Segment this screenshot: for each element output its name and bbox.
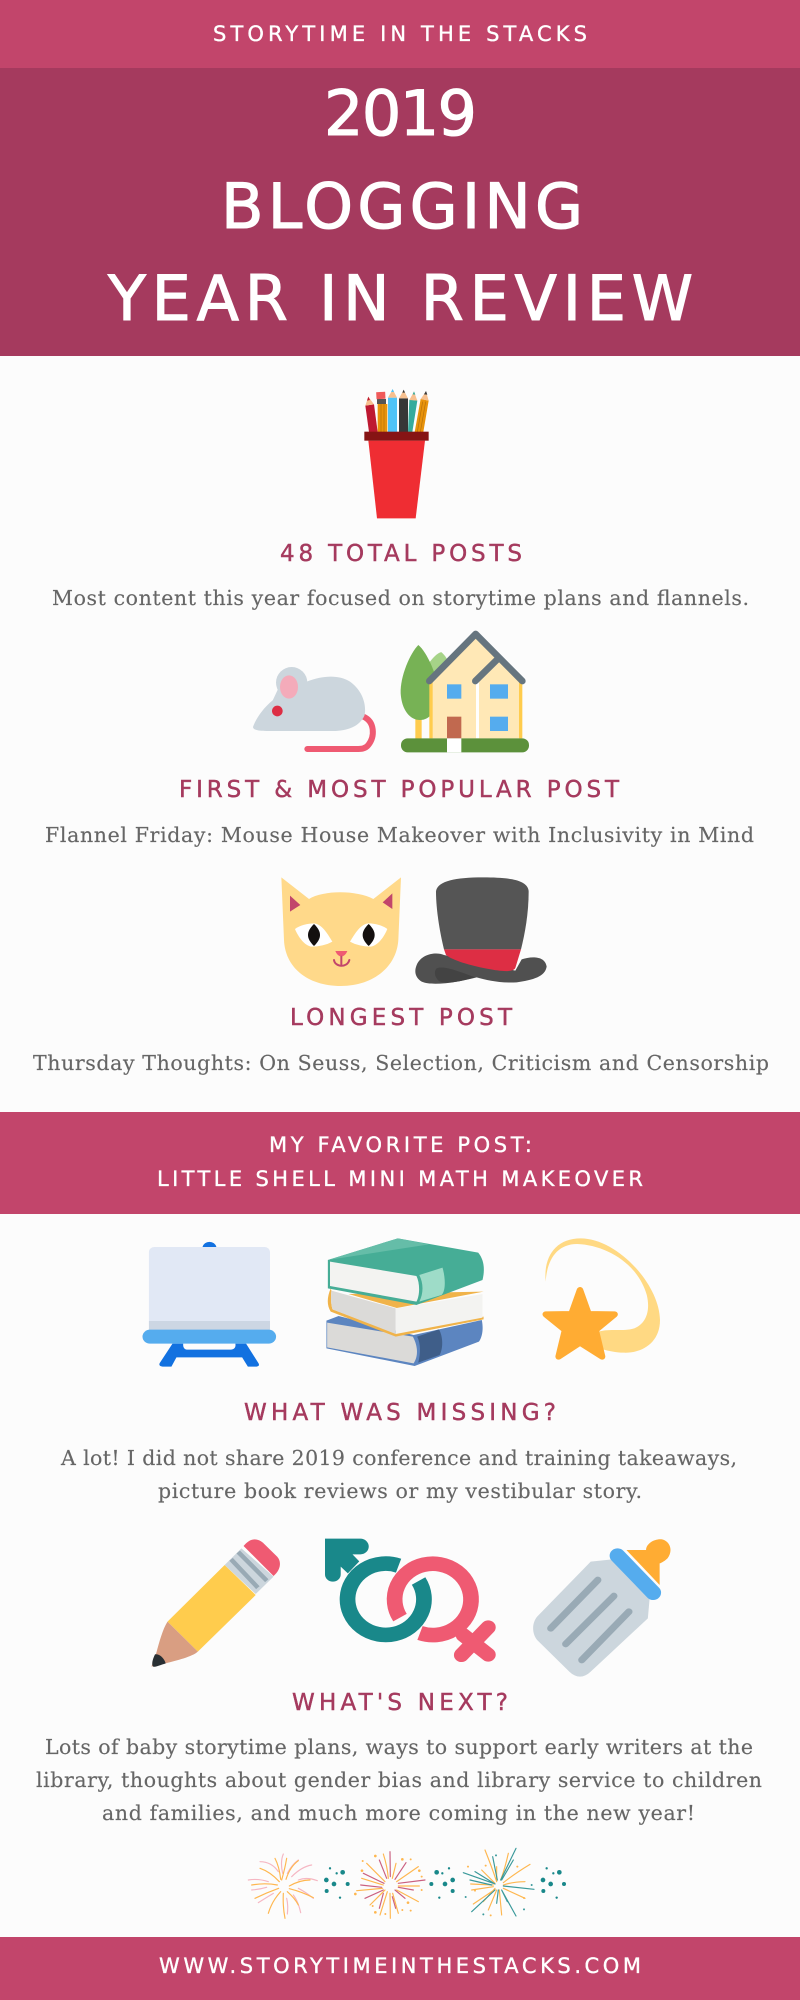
panel: total posts [52, 541, 749, 610]
heading: 48 total posts: 48 TOTAL POSTS [280, 541, 522, 567]
blog name: STORYTIME IN THE STACKS [213, 22, 587, 46]
title panel [0, 68, 800, 356]
heading: longest post: LONGEST POST [290, 1005, 513, 1031]
icon: pencil [151, 1539, 280, 1667]
icon: house with trees [401, 634, 529, 752]
title line 2: BLOGGING [221, 170, 583, 243]
text: longest post title: Thursday Thoughts: On Seuss, Selection, Criticism and Censorship [33, 1051, 769, 1075]
icon: shooting star [545, 1238, 660, 1357]
stars cluster 2 [429, 1867, 455, 1899]
text: popular post title: Flannel Friday: Mouse House Makeover with Inclusivity in Mind [45, 823, 754, 847]
firework: orange and crimson [354, 1852, 425, 1918]
icon: easel [142, 1242, 276, 1367]
text: next description: Lots of baby storytime plans, ways to support early writers at the [45, 1735, 753, 1759]
text: total posts description: Most content this year focused on storytime plans and flannels. [52, 586, 749, 610]
panel: longest post [33, 1005, 769, 1075]
stars cluster 3 [541, 1867, 566, 1899]
title line 1: 2019 [324, 77, 477, 150]
heading: what's next: WHAT'S NEXT? [292, 1690, 508, 1716]
stars cluster 1 [324, 1867, 350, 1899]
banner line 1: MY FAVORITE POST: [269, 1133, 532, 1157]
text: next description: and families, and much more coming in the new year! [102, 1801, 695, 1825]
text: missing description [60, 1446, 737, 1503]
text: next description: library, thoughts about gender bias and library service to children [36, 1768, 762, 1792]
heading: what was missing: WHAT WAS MISSING? [244, 1400, 556, 1426]
firework: orange and teal [463, 1848, 534, 1916]
panel: what was missing [60, 1400, 737, 1503]
heading: first and most popular post: FIRST & MOST POPULAR POST [179, 777, 620, 803]
icon: mouse [253, 667, 373, 749]
icon: pencil cup [364, 389, 429, 518]
fireworks row [248, 1848, 566, 1918]
banner line 2: LITTLE SHELL MINI MATH MAKEOVER [157, 1167, 643, 1191]
icon: stack of books [326, 1238, 484, 1366]
firework: orange and pink [248, 1854, 317, 1918]
banner: favorite post [0, 1112, 800, 1214]
panel: first and most popular post [45, 777, 754, 847]
header banner [0, 0, 800, 68]
title line 3: YEAR IN REVIEW [107, 262, 693, 335]
icon: cat face [281, 877, 401, 986]
icon: gender symbols [325, 1539, 488, 1655]
icon: baby bottle [533, 1539, 671, 1677]
panel: what's next [36, 1690, 762, 1825]
website url: WWW.STORYTIMEINTHESTACKS.COM [159, 1954, 641, 1978]
text: missing description: A lot! I did not share 2019 conference and training takeaways, [60, 1446, 737, 1470]
text: next description [36, 1735, 762, 1825]
text: missing description: picture book reviews or my vestibular story. [158, 1479, 642, 1503]
icon: top hat [415, 877, 547, 984]
footer banner [0, 1937, 800, 2000]
